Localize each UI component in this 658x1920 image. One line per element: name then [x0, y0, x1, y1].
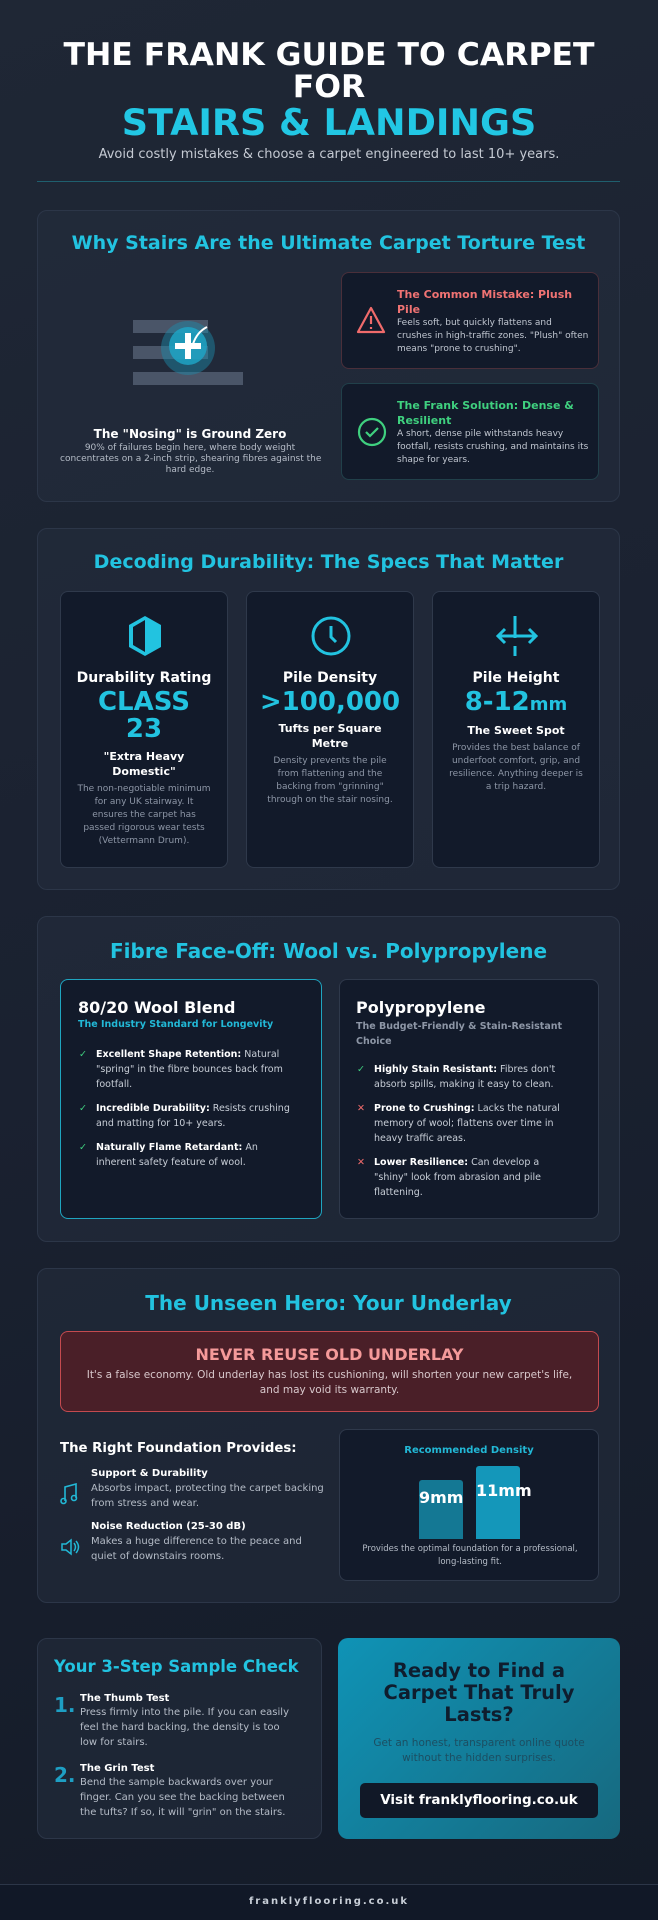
step 1: 1. [54, 1693, 76, 1717]
card: durability rating: CLASS [98, 687, 190, 717]
card: common mistake: means "prone to crushing". [397, 344, 521, 354]
card: polypropylene: Choice [356, 1036, 392, 1047]
caption: nosing: concentrates on a 2-inch strip, shearing fibres against the [60, 454, 321, 464]
card: durability rating: ensures the carpet has [92, 810, 196, 820]
warning box [60, 1331, 599, 1412]
bar chart [419, 1466, 532, 1539]
card: frank solution: Resilient [397, 414, 451, 427]
panel: fibre face-off [37, 916, 620, 1242]
card: wool: inherent safety feature of wool. [96, 1157, 246, 1168]
card: pile density: Metre [312, 737, 348, 750]
title [63, 37, 595, 144]
card: polypropylene: ✓ [357, 1064, 365, 1075]
illustration: stair nosing [133, 320, 243, 385]
card: durability rating: (Vettermann Drum). [99, 836, 189, 846]
step 1: The Thumb Test [80, 1693, 169, 1704]
card: wool: ✓ [79, 1142, 87, 1153]
card: pile density: >100,000 [260, 687, 400, 717]
card: wool: "spring" in the fibre bounces back from [96, 1064, 283, 1075]
step 1 [54, 1693, 289, 1748]
step 2: the tufts? If so, it will "grin" on the stairs. [80, 1807, 285, 1818]
bar chart: 9mm [419, 1488, 463, 1507]
card: pile density: backing from "grinning" [276, 782, 384, 792]
step 1: feel the hard backing, the density is too [80, 1722, 280, 1733]
card: wool: ✓ [79, 1103, 87, 1114]
card: wool: Excellent Shape Retention: Natural [96, 1049, 279, 1060]
panel: call to action: Lasts? [444, 1703, 514, 1726]
heading: Your 3-Step Sample Check [54, 1657, 299, 1676]
card: common mistake: Feels soft, but quickly flattens and [397, 318, 552, 328]
card: durability rating: Domestic" [112, 765, 176, 778]
icon: warning [356, 306, 386, 334]
caption: nosing [60, 427, 321, 475]
card: pile height: resilience. Anything deeper is [449, 769, 583, 779]
card: wool: footfall. [96, 1079, 132, 1090]
card: durability rating: Durability Rating [77, 670, 211, 686]
card: polypropylene: memory of wool; flattens over time in [374, 1118, 554, 1129]
step 2: 2. [54, 1763, 76, 1787]
card: polypropylene: Polypropylene [356, 998, 485, 1017]
heading: Why Stairs Are the Ultimate Carpet Torture Test [72, 232, 585, 254]
card: polypropylene: ✕ [357, 1157, 365, 1168]
caption: nosing: 90% of failures begin here, where body weight [85, 443, 295, 453]
card: pile height [432, 591, 600, 868]
card: common mistake: crushes in high-traffic zones. "Plush" often [397, 331, 588, 341]
card: pile density: Tufts per Square [278, 722, 382, 735]
panel: sample check [37, 1638, 322, 1839]
icon: shield [129, 616, 161, 656]
card: common mistake: Pile [397, 303, 420, 316]
panel: call to action: Ready to Find a [393, 1659, 565, 1682]
card: wool: 80/20 Wool Blend [78, 998, 235, 1017]
icon: check circle [358, 418, 386, 446]
card: wool: Incredible Durability: Resists crushing [96, 1103, 290, 1114]
card: frank solution: shape for years. [397, 455, 470, 465]
card: common mistake: The Common Mistake: Plush [397, 288, 572, 301]
title: STAIRS & LANDINGS [122, 101, 536, 144]
card: polypropylene: Highly Stain Resistant: Fibres don't [374, 1064, 555, 1075]
step 2: The Grin Test [80, 1763, 154, 1774]
button: Visit franklyflooring.co.uk [380, 1792, 578, 1808]
heading: Decoding Durability: The Specs That Matter [94, 551, 563, 573]
card: polypropylene [339, 979, 599, 1219]
caption: nosing: hard edge. [166, 465, 214, 475]
card: wool: Naturally Flame Retardant: An [96, 1142, 258, 1153]
card: polypropylene: The Budget-Friendly & Stain-Resistant [356, 1021, 562, 1032]
card: pile height: Pile Height [473, 670, 559, 686]
card: wool: The Industry Standard for Longevity [78, 1019, 273, 1030]
card: polypropylene: heavy traffic areas. [374, 1133, 466, 1144]
step 2: finger. Can you see the backing between [80, 1792, 285, 1803]
card: durability rating: "Extra Heavy [104, 750, 184, 763]
item: support [60, 1468, 324, 1509]
foundation list [60, 1441, 324, 1562]
footer [0, 1884, 658, 1920]
step 2 [54, 1763, 285, 1818]
bar chart: 11mm [476, 1481, 532, 1500]
heading: Fibre Face-Off: Wool vs. Polypropylene [110, 939, 547, 963]
card: frank solution: footfall, resists crushing, and maintains its [397, 442, 588, 452]
step 1: low for stairs. [80, 1737, 148, 1748]
card: pile height: 8-12mm [465, 687, 567, 717]
card: polypropylene: absorb spills, making it easy to clean. [374, 1079, 554, 1090]
card: durability rating [60, 591, 228, 868]
card: durability rating: 23 [126, 714, 162, 744]
icon: clock [312, 616, 350, 656]
warning box: NEVER REUSE OLD UNDERLAY [196, 1345, 463, 1364]
card: wool: ✓ [79, 1049, 87, 1060]
card: recommended density [339, 1429, 599, 1581]
card: polypropylene: Lower Resilience: Can develop a [374, 1157, 539, 1168]
card: pile height: underfoot comfort, grip, and [452, 756, 580, 766]
card: frank solution: A short, dense pile withstands heavy [397, 429, 563, 439]
card: polypropylene: ✕ [357, 1103, 365, 1114]
card: polypropylene: flattening. [374, 1187, 423, 1198]
item: support: Support & Durability [91, 1468, 208, 1479]
panel: call to action: Get an honest, transparent online quote without the hidden surprises. [373, 1737, 585, 1764]
card: pile height: a trip hazard. [486, 782, 546, 792]
step 1: Press firmly into the pile. If you can easily [80, 1707, 289, 1718]
card: polypropylene: "shiny" look from abrasion and pile [374, 1172, 541, 1183]
card: frank solution: The Frank Solution: Dense & [397, 399, 574, 412]
item: noise [61, 1521, 302, 1562]
panel: why stairs [37, 210, 620, 502]
card: common mistake [341, 272, 599, 369]
card: durability rating: for any UK stairway. It [95, 797, 193, 807]
subtitle: Avoid costly mistakes & choose a carpet engineered to last 10+ years. [99, 147, 559, 162]
card: pile density: from flattening and the [278, 769, 382, 779]
panel: underlay [37, 1268, 620, 1603]
card: pile height: The Sweet Spot [467, 724, 565, 737]
panel: call to action [338, 1638, 620, 1839]
footer: franklyflooring.co.uk [249, 1896, 409, 1907]
card: polypropylene: Prone to Crushing: Lacks the natural [374, 1103, 560, 1114]
card: recommended density: Recommended Density [404, 1445, 534, 1456]
card: pile density: Density prevents the pile [273, 756, 387, 766]
card: durability rating: The non-negotiable minimum [77, 784, 211, 794]
card: pile density [246, 591, 414, 868]
card: pile density: Pile Density [283, 670, 377, 686]
title: THE FRANK GUIDE TO CARPET [63, 37, 595, 73]
item: noise: Makes a huge difference to the peace and quiet of downstairs rooms. [91, 1536, 302, 1562]
card: wool [60, 979, 322, 1219]
item: noise: Noise Reduction (25-30 dB) [91, 1521, 246, 1532]
step 2: Bend the sample backwards over your [80, 1777, 273, 1788]
icon: arrows [496, 616, 538, 656]
card: pile height: Provides the best balance of [452, 743, 580, 753]
card: wool: and matting for 10+ years. [96, 1118, 225, 1129]
caption: nosing: The "Nosing" is Ground Zero [94, 427, 286, 441]
card: frank solution [341, 383, 599, 480]
warning box: It's a false economy. Old underlay has lost its cushioning, will shorten your new carpet's life, and may void its warranty. [87, 1369, 572, 1396]
card: recommended density: Provides the optimal foundation for a professional, long-lasting fit. [362, 1544, 578, 1567]
panel: decoding durability [37, 528, 620, 890]
card: pile density: through on the stair nosing. [267, 795, 393, 805]
button [360, 1783, 598, 1818]
heading: The Unseen Hero: Your Underlay [145, 1291, 512, 1315]
card: durability rating: passed rigorous wear tests [83, 823, 205, 833]
panel: call to action: Carpet That Truly [384, 1681, 574, 1704]
item: support: Absorbs impact, protecting the carpet backing from stress and wear. [91, 1483, 324, 1509]
foundation list: The Right Foundation Provides: [60, 1441, 297, 1456]
title: FOR [293, 69, 365, 105]
